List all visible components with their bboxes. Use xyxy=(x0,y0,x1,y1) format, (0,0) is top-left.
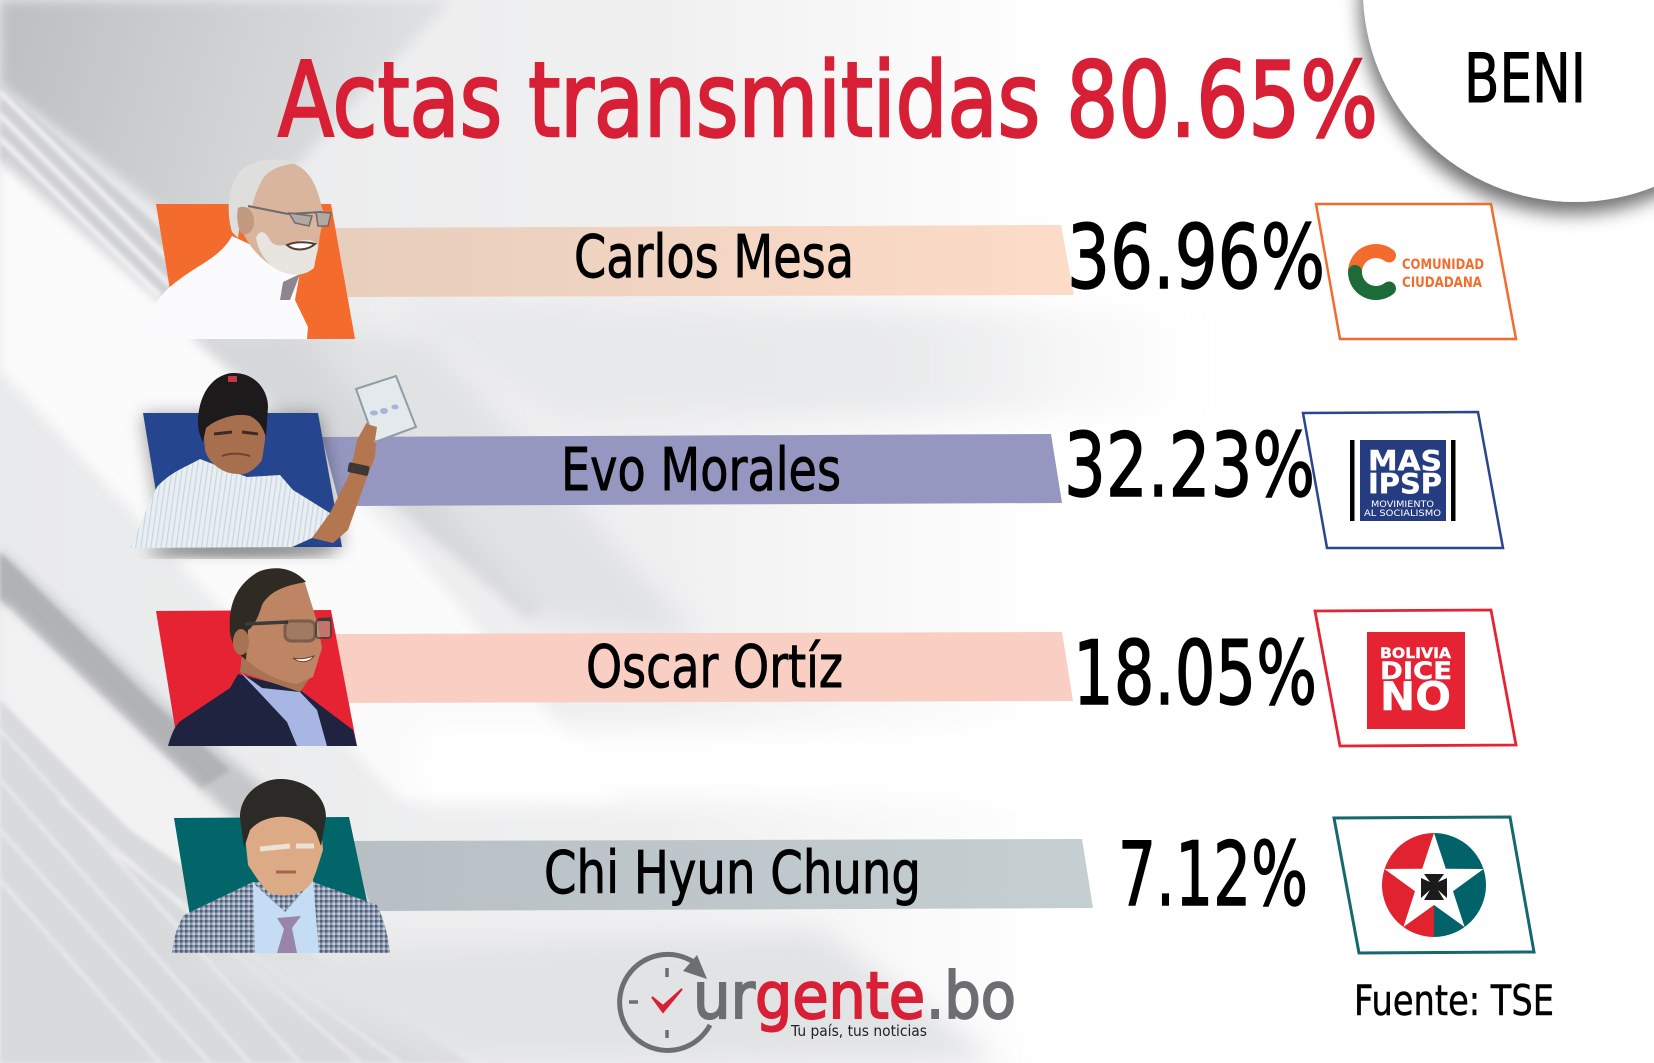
bar: Evo Morales xyxy=(322,434,1062,506)
source note: Fuente: TSE xyxy=(1354,976,1554,1025)
row: Carlos Mesa xyxy=(145,160,1516,339)
photo: Chi Hyun Chung xyxy=(172,779,390,953)
percentage: 18.05%: 18.05% xyxy=(1073,622,1317,725)
party logo box: MAS IPSP: AL SOCIALISMO xyxy=(1364,509,1441,519)
party logo box: star emblem xyxy=(1334,817,1534,953)
icon: clock with arrow xyxy=(620,954,710,1050)
bar: Carlos Mesa xyxy=(335,225,1074,297)
row: Oscar Ortíz xyxy=(156,568,1516,746)
percentage: 36.96%: 36.96% xyxy=(1067,206,1325,309)
logo text xyxy=(1368,444,1442,500)
brand logo: urgente.bo xyxy=(620,954,1016,1050)
name: Chi Hyun Chung: Chi Hyun Chung xyxy=(544,838,921,907)
bar: Oscar Ortíz xyxy=(335,632,1073,703)
logo text: MAS xyxy=(1368,444,1442,477)
logo tagline: Tu país, tus noticias xyxy=(790,1022,927,1040)
name: Evo Morales: Evo Morales xyxy=(561,435,841,504)
photo: Carlos Mesa xyxy=(145,160,331,339)
logo mark: C xyxy=(1355,251,1389,293)
logo circle xyxy=(1382,833,1434,937)
logo cross xyxy=(1421,874,1447,900)
name: Oscar Ortíz: Oscar Ortíz xyxy=(586,632,843,701)
photo: Oscar Ortíz xyxy=(168,568,357,746)
percentage: 7.12%: 7.12% xyxy=(1118,823,1308,926)
percentage: 32.23%: 32.23% xyxy=(1064,414,1315,517)
title: Actas transmitidas 80.65% xyxy=(278,41,1378,161)
logo text: DICE xyxy=(1380,657,1452,685)
logo bars xyxy=(1350,440,1354,521)
logo star xyxy=(1384,833,1484,927)
color panel: red xyxy=(156,610,357,746)
party logo box: MAS IPSP xyxy=(1303,412,1503,548)
logo wordmark: ur xyxy=(693,960,756,1034)
logo square xyxy=(1360,440,1446,521)
region badge: BENI: BENI xyxy=(1464,40,1586,119)
row: Chi Hyun Chung xyxy=(172,779,1534,953)
party logo box: Comunidad Ciudadana xyxy=(1316,204,1516,339)
logo text xyxy=(1380,646,1452,720)
logo text: CIUDADANA xyxy=(1402,275,1482,291)
logo wordmark xyxy=(693,960,1016,1034)
name: Carlos Mesa: Carlos Mesa xyxy=(574,222,854,291)
logo text xyxy=(1402,257,1484,291)
logo text: NO xyxy=(1380,675,1451,720)
logo text: COMUNIDAD xyxy=(1402,257,1484,273)
region badge: BENI xyxy=(1363,0,1654,202)
color panel: teal xyxy=(174,817,378,953)
logo square xyxy=(1367,632,1465,729)
party logo box: Bolivia Dice No xyxy=(1315,610,1516,746)
color panel: blue xyxy=(143,413,342,547)
logo wordmark: .bo xyxy=(926,960,1016,1034)
bar: Chi Hyun Chung xyxy=(352,839,1093,911)
logo text: BOLIVIA xyxy=(1380,646,1451,662)
logo wordmark: gente xyxy=(755,960,925,1034)
party logo box: MAS IPSP: MOVIMIENTO xyxy=(1371,500,1434,510)
row: Evo Morales xyxy=(130,373,1503,557)
logo text: IPSP xyxy=(1368,467,1442,500)
color panel: orange xyxy=(156,204,355,339)
photo: Evo Morales xyxy=(130,373,416,557)
